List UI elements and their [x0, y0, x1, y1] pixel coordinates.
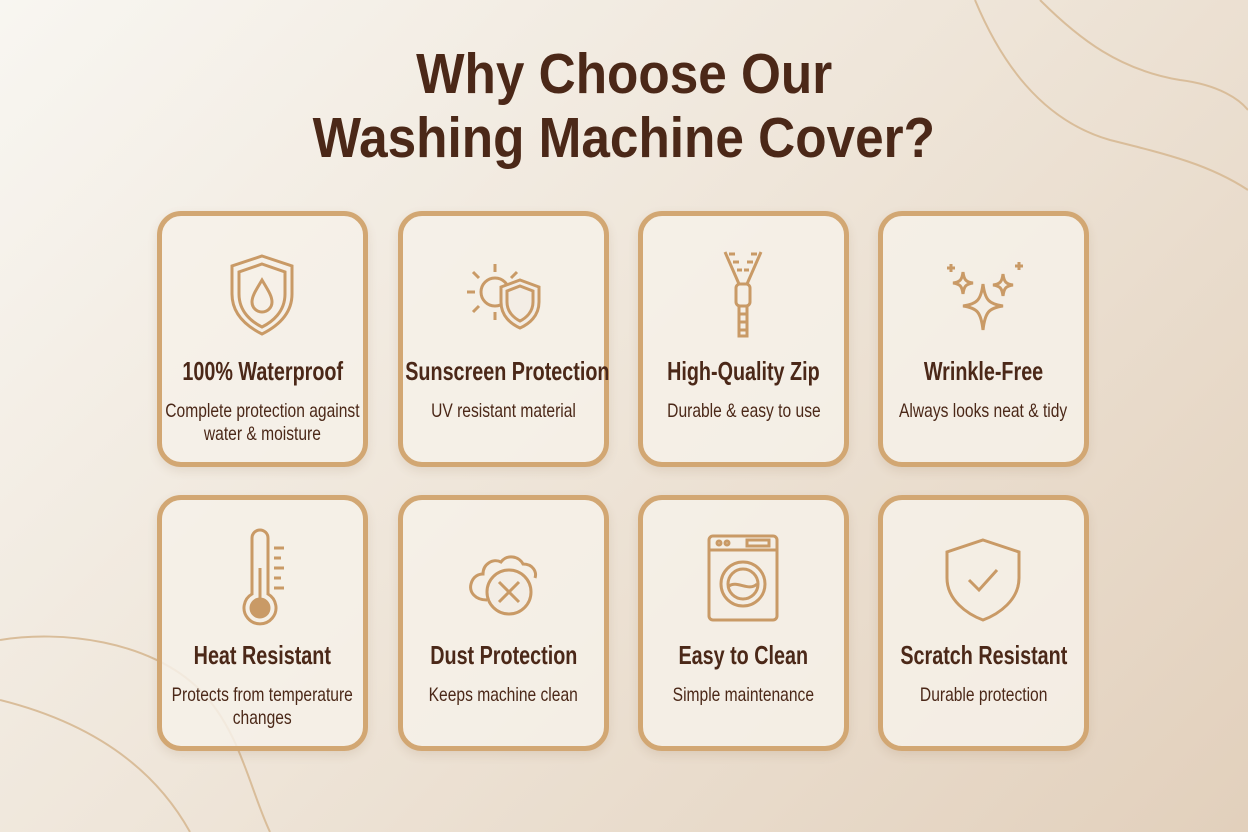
- title: Why Choose Our: [416, 42, 832, 106]
- panel: dust: [398, 495, 609, 751]
- title: Washing Machine Cover?: [313, 106, 935, 170]
- icon: washing machine: [708, 534, 778, 622]
- panel: zip: [638, 211, 849, 467]
- panel: clean: Simple maintenance: [673, 684, 814, 706]
- panel: wrinkle-free: [878, 211, 1089, 467]
- panel: waterproof: Complete protection against: [165, 400, 360, 422]
- icon: shield drop: [230, 254, 294, 336]
- panel: waterproof: 100% Waterproof: [182, 356, 343, 386]
- icon: zipper: [724, 251, 762, 338]
- panel: dust: Dust Protection: [430, 640, 577, 670]
- panel: sunscreen: UV resistant material: [431, 400, 576, 422]
- title: [312, 42, 935, 170]
- icon: sparkles: [947, 262, 1023, 330]
- panel: waterproof: [157, 211, 368, 467]
- panel: dust: Keeps machine clean: [429, 684, 578, 706]
- panel: sunscreen: Sunscreen Protection: [405, 356, 609, 386]
- panel: heat: Protects from temperature: [172, 684, 353, 706]
- panel: wrinkle-free: Wrinkle-Free: [924, 356, 1043, 386]
- panel: scratch: Durable protection: [920, 684, 1047, 706]
- panel: heat: Heat Resistant: [194, 640, 331, 670]
- panel: zip: Durable & easy to use: [667, 400, 820, 422]
- icon: shield check: [946, 538, 1020, 622]
- icon: thermometer: [242, 528, 284, 626]
- panel: clean: Easy to Clean: [679, 640, 808, 670]
- panel: wrinkle-free: Always looks neat & tidy: [899, 400, 1068, 422]
- icon: sun shield: [467, 264, 540, 330]
- panel: scratch: [878, 495, 1089, 751]
- icon: cloud x: [469, 555, 538, 616]
- panel: scratch: Scratch Resistant: [900, 640, 1067, 670]
- panel: heat: changes: [233, 707, 292, 729]
- panel: waterproof: water & moisture: [204, 423, 321, 445]
- panel: sunscreen: [398, 211, 609, 467]
- panel: zip: High-Quality Zip: [667, 356, 820, 386]
- panel: clean: [638, 495, 849, 751]
- panel: heat: [157, 495, 368, 751]
